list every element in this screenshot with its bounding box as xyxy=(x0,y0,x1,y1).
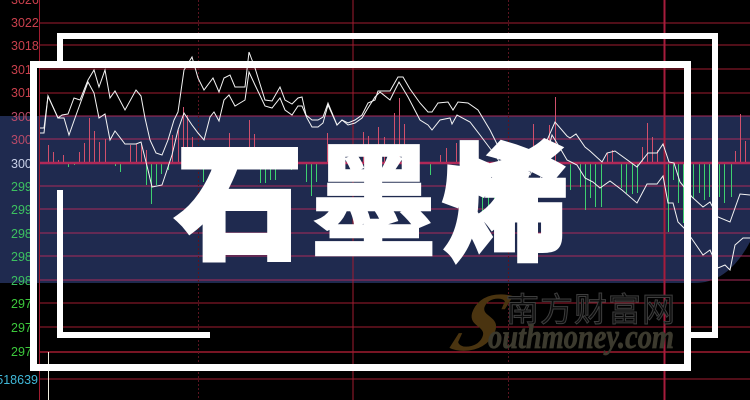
baseline xyxy=(40,162,750,164)
navy highlight band xyxy=(0,116,750,283)
price axis labels: 297 xyxy=(11,297,32,311)
watermark: southmoney xyxy=(438,275,676,368)
price axis labels: 300 xyxy=(11,157,32,171)
front white frame xyxy=(34,64,688,368)
watermark url: outhmoney.com xyxy=(488,319,674,356)
price axis labels: 298 xyxy=(11,274,32,288)
price axis labels: 297 xyxy=(11,321,32,335)
price axis labels: 301 xyxy=(11,86,32,100)
price axis labels: 297 xyxy=(11,345,32,359)
price axis labels: 3022 xyxy=(11,16,39,30)
price axis labels: 301 xyxy=(11,63,32,77)
price axis labels: 299 xyxy=(11,203,32,217)
title xyxy=(178,135,567,275)
back white frame xyxy=(60,36,715,335)
price axis labels xyxy=(0,0,39,387)
price axis labels: 3018 xyxy=(11,39,39,53)
price axis labels: 300 xyxy=(11,110,32,124)
white line series upper xyxy=(40,52,750,222)
watermark chinese name: 南方财富网 xyxy=(506,283,676,331)
white tick line xyxy=(48,352,50,400)
red volume bars xyxy=(48,97,746,163)
title: 烯 xyxy=(443,137,567,275)
price axis labels: 298 xyxy=(11,227,32,241)
price axis labels: 300 xyxy=(11,133,32,147)
watermark big S: S xyxy=(438,275,526,368)
white line series lower xyxy=(40,72,750,270)
title: 墨 xyxy=(311,135,436,274)
green volume bars xyxy=(68,163,732,232)
title: 石 xyxy=(178,137,301,274)
price axis labels: 299 xyxy=(11,180,32,194)
price axis labels: 298 xyxy=(11,250,32,264)
